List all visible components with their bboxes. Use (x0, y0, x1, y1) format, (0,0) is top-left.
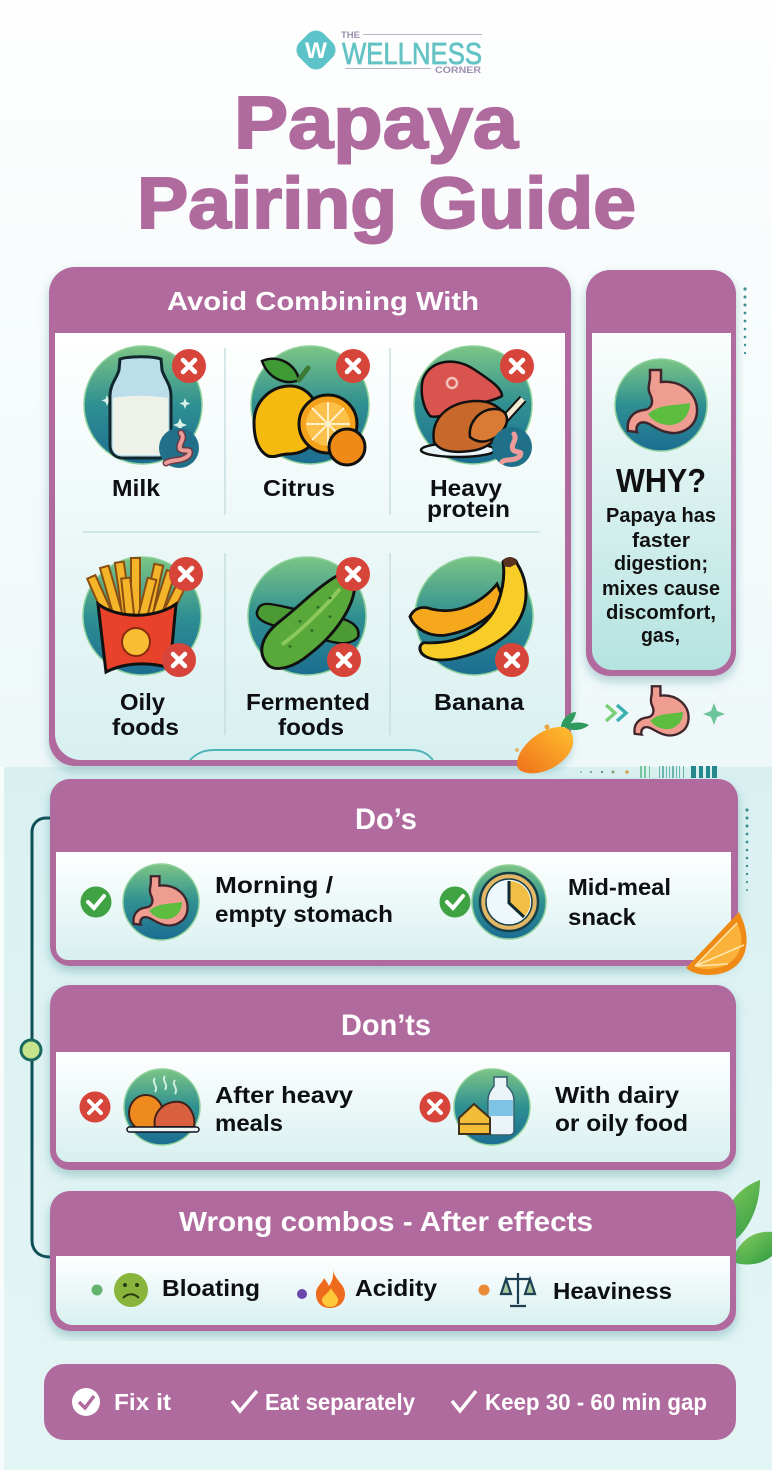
item: mid-meal snack: Mid-meal (568, 874, 671, 900)
decorative barcode strip (580, 766, 717, 778)
item: mid-meal snack: snack (568, 904, 636, 930)
item: after heavy meals: meals (215, 1110, 283, 1136)
logo: The Wellness Corner: CORNER (435, 65, 482, 75)
heading: don'ts: Don’ts (341, 1009, 431, 1042)
item: with dairy or oily food (420, 1069, 688, 1145)
decorative mango (515, 712, 589, 773)
food: fermented foods (248, 557, 370, 677)
item: acidity (297, 1270, 437, 1308)
panel: wrong combos (50, 1191, 736, 1331)
panel: don'ts (50, 985, 736, 1170)
item: eat separately: Eat separately (265, 1389, 415, 1415)
label: milk: Milk (112, 475, 160, 501)
label: citrus: Citrus (263, 475, 335, 501)
icon: stomach (615, 359, 707, 451)
label: heavy protein: Heavy (430, 475, 502, 501)
item: acidity: Acidity (355, 1275, 437, 1301)
food: oily foods (83, 557, 203, 677)
label: fermented foods (246, 689, 370, 740)
label: heavy protein: protein (427, 496, 510, 522)
logo: The Wellness Corner: W (305, 38, 327, 63)
panel: why (586, 270, 736, 676)
text: why explanation: faster (632, 530, 690, 552)
title: Pairing Guide (137, 164, 636, 244)
item: mid-meal snack (440, 865, 671, 939)
decorative dots: middle right (745, 808, 749, 891)
heading: wrong combos: Wrong combos - After effects (179, 1206, 593, 1237)
panel: avoid combining with (49, 267, 571, 766)
decorative orange slice (686, 912, 747, 975)
heading: avoid combining with: Avoid Combining With (167, 286, 479, 316)
label: fermented foods: Fermented (246, 689, 370, 715)
label: fix it: Fix it (114, 1389, 171, 1415)
text: why explanation: discomfort, (606, 602, 716, 624)
item: heaviness (478, 1273, 672, 1306)
bottom arc decoration (190, 750, 433, 760)
heading: why: WHY? (616, 462, 706, 499)
logo: The Wellness Corner (292, 26, 482, 75)
item: with dairy or oily food: With dairy (555, 1082, 679, 1108)
label: oily foods: foods (112, 714, 179, 740)
text: why explanation: digestion; (614, 553, 708, 575)
food: heavy protein (414, 346, 534, 467)
label: heavy protein (427, 475, 510, 522)
decorative dots: top right (743, 287, 747, 354)
text: why explanation: Papaya has (606, 505, 716, 527)
item: after heavy meals (80, 1069, 353, 1145)
logo: The Wellness Corner: THE (341, 30, 360, 40)
panel: do's (50, 779, 738, 966)
decorative leaves (720, 1180, 772, 1264)
item: keep 30-60 min gap: Keep 30 - 60 min gap (485, 1389, 707, 1415)
logo: The Wellness Corner: WELLNESS (342, 36, 482, 71)
item: morning empty stomach (80, 864, 393, 940)
label: fermented foods: foods (278, 714, 344, 740)
item: bloating (92, 1273, 260, 1307)
grid dividers (83, 348, 540, 735)
title: Papaya (234, 81, 519, 164)
item: morning empty stomach: Morning / (215, 872, 334, 898)
food: citrus (251, 346, 370, 465)
text: why explanation: mixes cause (602, 578, 720, 600)
item: morning empty stomach: empty stomach (215, 901, 393, 927)
panel: fix it (44, 1364, 736, 1440)
text: why explanation (602, 505, 720, 647)
item: bloating: Bloating (162, 1275, 260, 1301)
icon: check badge (72, 1388, 100, 1416)
heading: do's: Do’s (355, 803, 417, 836)
food: banana (410, 557, 533, 677)
label: banana: Banana (434, 689, 524, 715)
timeline connector (21, 818, 52, 1257)
food: milk (84, 346, 206, 468)
text: why explanation: gas, (641, 625, 680, 647)
label: oily foods: Oily (120, 689, 165, 715)
label: oily foods (112, 689, 179, 740)
item: after heavy meals: After heavy (215, 1082, 353, 1108)
title (137, 81, 636, 244)
item: heaviness: Heaviness (553, 1278, 672, 1304)
item: with dairy or oily food: or oily food (555, 1110, 688, 1136)
arrows and small stomach icon (606, 686, 725, 735)
